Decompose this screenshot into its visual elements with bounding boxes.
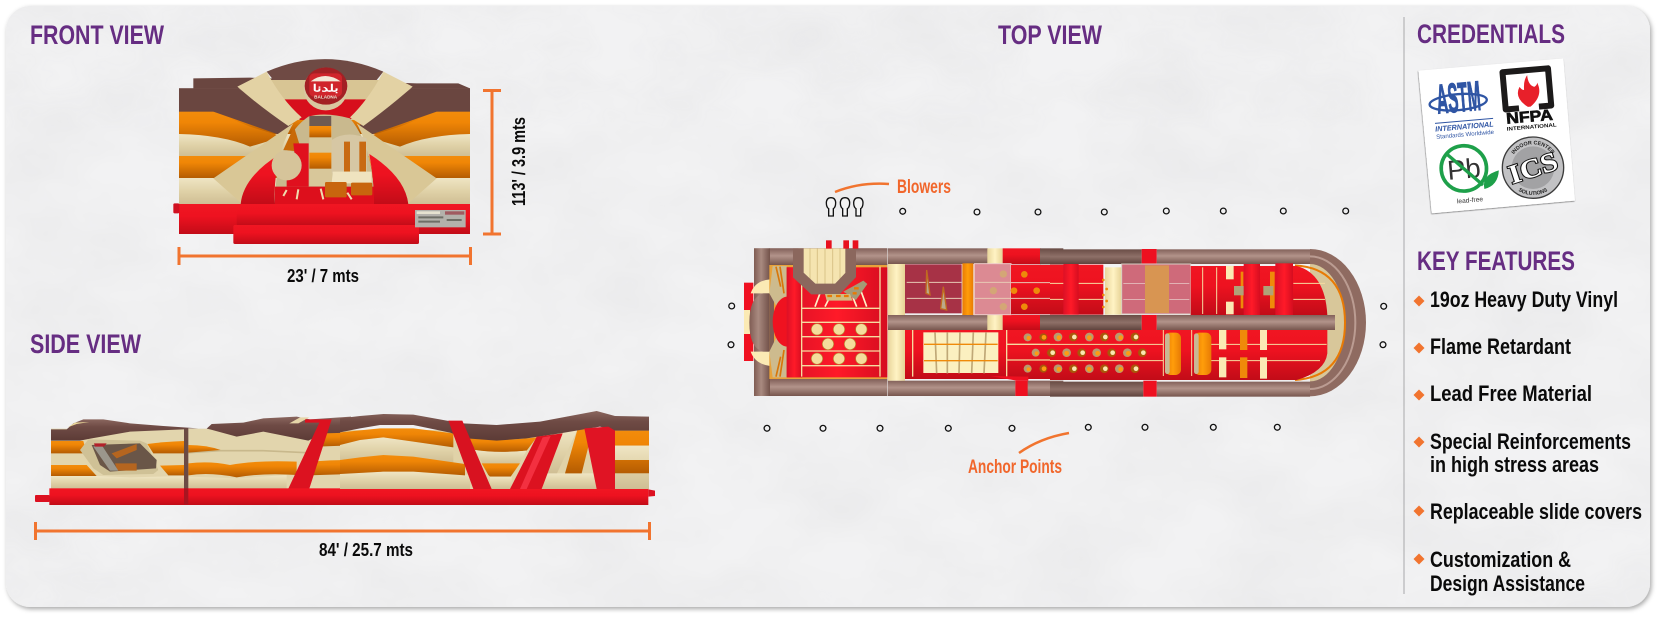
entry floor xyxy=(769,266,887,377)
logo: ICS: INDOOR CENTER xyxy=(1511,140,1554,154)
logo badge: بلدنا xyxy=(313,84,339,95)
feature: customization: Customization & xyxy=(1430,547,1571,572)
label: front width: 23' / 7 mts xyxy=(287,266,359,286)
sign panel xyxy=(415,210,466,227)
heading: key features: KEY FEATURES xyxy=(1417,246,1575,276)
cream balls xyxy=(811,324,867,364)
illustration: front view of inflatable xyxy=(173,59,470,244)
window xyxy=(80,439,158,475)
feature: special reinforcements: in high stress areas xyxy=(1430,452,1599,477)
logo: lead free: Pb xyxy=(1446,152,1482,186)
illustration: side view, right half xyxy=(340,411,655,505)
blower tubes xyxy=(826,240,858,249)
feature: special reinforcements xyxy=(1414,429,1631,477)
logo: NFPA xyxy=(1502,68,1558,133)
heading: front view: FRONT VIEW xyxy=(30,20,164,50)
logo: lead free: lead-free xyxy=(1457,196,1484,205)
outer tubes xyxy=(1050,249,1366,397)
label: side length: 84' / 25.7 mts xyxy=(319,540,413,560)
label: anchor points: Anchor Points xyxy=(968,457,1062,478)
red strap xyxy=(288,419,332,489)
brown top tube xyxy=(51,419,198,441)
logo: lead free xyxy=(1439,143,1502,207)
slide with brown collar xyxy=(798,248,867,301)
red straps xyxy=(448,421,492,489)
anchor points xyxy=(728,208,1387,431)
dimension: front height xyxy=(483,89,501,236)
heading: top view: TOP VIEW xyxy=(998,20,1102,50)
upper lane xyxy=(905,263,1063,315)
logo: ICS: ICS xyxy=(1505,146,1561,190)
arrow: blowers leader xyxy=(835,184,889,192)
icon: blowers xyxy=(826,198,863,216)
logo: ASTM: INTERNATIONAL xyxy=(1435,119,1494,134)
heading: side view: SIDE VIEW xyxy=(30,329,141,359)
dimension: side length xyxy=(34,522,651,540)
label: blowers: Blowers xyxy=(897,177,951,198)
feature: 19oz heavy duty vinyl: 19oz Heavy Duty Vinyl xyxy=(1430,287,1618,312)
illustration: top view, entry half xyxy=(744,240,1063,396)
arrow: anchor points leader xyxy=(1019,433,1069,453)
feature: customization: Design Assistance xyxy=(1430,571,1585,596)
logo: NFPA: NFPA xyxy=(1506,107,1553,128)
mid section tubes xyxy=(888,248,1063,396)
logo badge: BALADNA xyxy=(314,95,338,100)
feature: customization xyxy=(1414,547,1585,596)
credentials card: ASTM xyxy=(1435,72,1482,123)
entry section shell xyxy=(744,248,887,396)
heading: credentials: CREDENTIALS xyxy=(1417,19,1565,49)
divider line xyxy=(1404,17,1405,594)
feature: flame retardant: Flame Retardant xyxy=(1430,334,1572,359)
far upper lane xyxy=(1050,263,1327,315)
illustration: top view, far half xyxy=(1047,249,1366,397)
logo: ICS xyxy=(1502,136,1564,199)
far lower lane xyxy=(1047,330,1327,380)
logo: ICS: SOLUTIONS xyxy=(1518,188,1548,195)
label: front height: 113' / 3.9 mts xyxy=(509,117,529,206)
logo: NFPA: INTERNATIONAL xyxy=(1507,122,1558,133)
logo badge xyxy=(304,67,348,110)
feature: lead free material: Lead Free Material xyxy=(1430,381,1592,406)
credentials card xyxy=(1417,58,1576,215)
logo: ASTM: Standards Worldwide xyxy=(1436,130,1495,141)
logo: ASTM xyxy=(1427,71,1495,141)
brown top tube xyxy=(340,411,649,441)
illustration: side view, left half xyxy=(35,417,351,505)
dimension: front width xyxy=(178,247,472,265)
lower lane xyxy=(905,330,1063,381)
